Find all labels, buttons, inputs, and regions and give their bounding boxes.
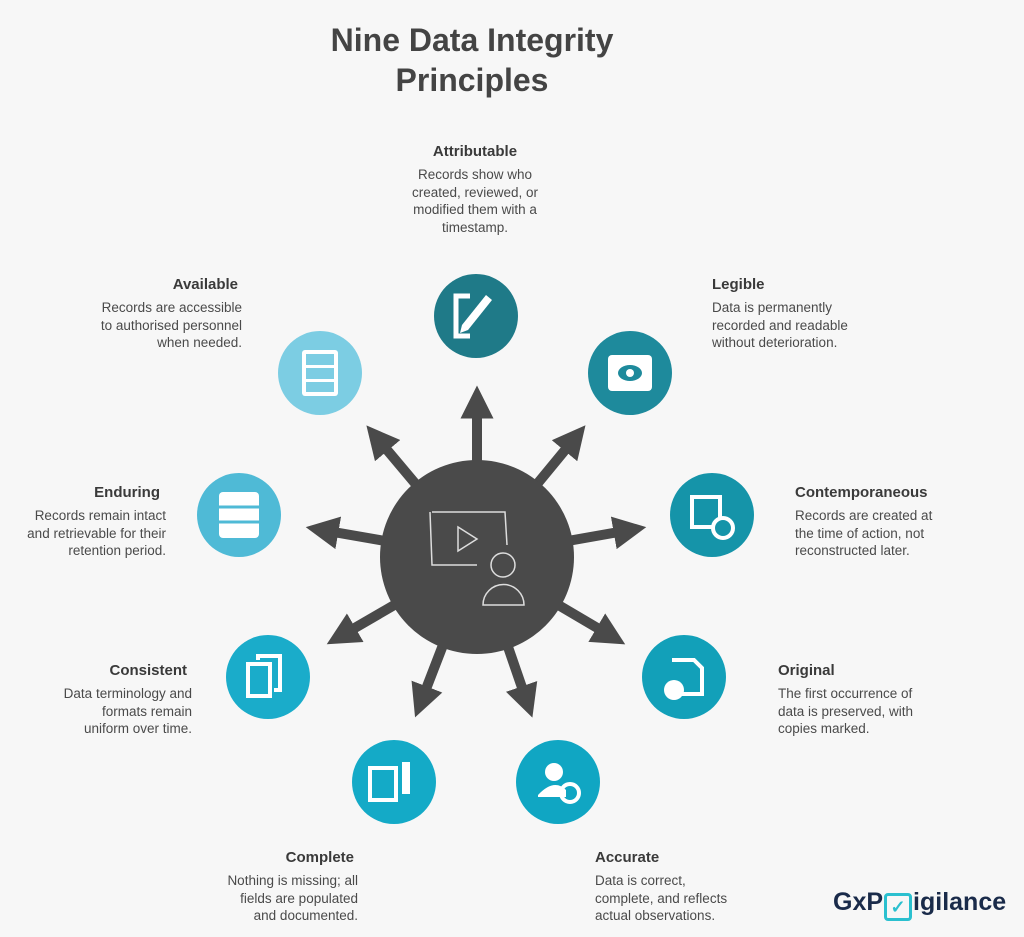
text: accurate: complete, and reflects — [595, 890, 727, 906]
text: original: The first occurrence of — [778, 686, 912, 701]
text: attributable: modified them with a — [413, 202, 537, 217]
text: enduring: Enduring — [94, 484, 160, 501]
text: enduring: Records remain intact — [35, 508, 166, 523]
icon: legible — [588, 331, 672, 415]
text: available — [101, 276, 242, 350]
central hub — [380, 460, 574, 654]
title — [331, 22, 614, 98]
icon: available — [278, 331, 362, 415]
icon: contemporaneous — [670, 473, 754, 557]
text: contemporaneous: Contemporaneous — [795, 484, 928, 501]
text: legible: without deterioration. — [712, 335, 837, 350]
text: complete: Complete — [286, 849, 354, 866]
text: enduring: and retrievable for their — [27, 526, 166, 540]
text: consistent: uniform over time. — [84, 721, 192, 736]
title: Nine Data Integrity — [331, 22, 613, 58]
text: legible: Legible — [712, 276, 765, 293]
text: original: Original — [778, 662, 835, 679]
text: attributable: created, reviewed, or — [412, 184, 538, 200]
icon: accurate — [516, 740, 600, 824]
text: accurate: Data is correct, — [595, 873, 686, 888]
text: contemporaneous — [795, 484, 932, 558]
text: contemporaneous: the time of action, not — [795, 526, 924, 540]
text: consistent — [64, 662, 192, 736]
arrows — [322, 402, 630, 702]
text: contemporaneous: reconstructed later. — [795, 543, 910, 558]
text: consistent: Data terminology and — [64, 686, 192, 701]
text: legible: recorded and readable — [712, 318, 848, 332]
icon: original — [642, 635, 726, 719]
text: original: copies marked. — [778, 721, 870, 736]
text: consistent: formats remain — [102, 704, 192, 718]
text: legible: Data is permanently — [712, 300, 832, 315]
icon: consistent — [226, 635, 310, 719]
icon: enduring — [197, 473, 281, 557]
text: available: to authorised personnel — [101, 318, 242, 332]
text: complete: Nothing is missing; all — [227, 873, 358, 888]
text: accurate: Accurate — [595, 849, 659, 866]
text: original — [778, 662, 913, 736]
text: available: Available — [173, 276, 238, 293]
text: available: Records are accessible — [102, 300, 242, 315]
text: complete: and documented. — [254, 908, 358, 923]
text: accurate: actual observations. — [595, 908, 715, 923]
text: complete: fields are populated — [240, 890, 358, 906]
text: accurate — [595, 849, 727, 923]
text: consistent: Consistent — [109, 662, 187, 679]
text: available: when needed. — [157, 335, 242, 350]
text: attributable — [412, 143, 538, 235]
title: Principles — [396, 62, 548, 98]
icon: complete — [352, 740, 436, 824]
text: enduring: retention period. — [68, 543, 166, 558]
icon: attributable — [434, 274, 518, 358]
text: original: data is preserved, with — [778, 704, 913, 718]
text: complete — [227, 849, 358, 923]
logo: GxP igilance — [833, 888, 1006, 916]
text: attributable: timestamp. — [442, 220, 508, 234]
text: legible — [712, 276, 848, 350]
logo: ✓ — [890, 897, 906, 917]
text: attributable: Attributable — [433, 143, 517, 160]
text: attributable: Records show who — [418, 167, 532, 182]
text: enduring — [27, 484, 166, 558]
text: contemporaneous: Records are created at — [795, 508, 932, 523]
